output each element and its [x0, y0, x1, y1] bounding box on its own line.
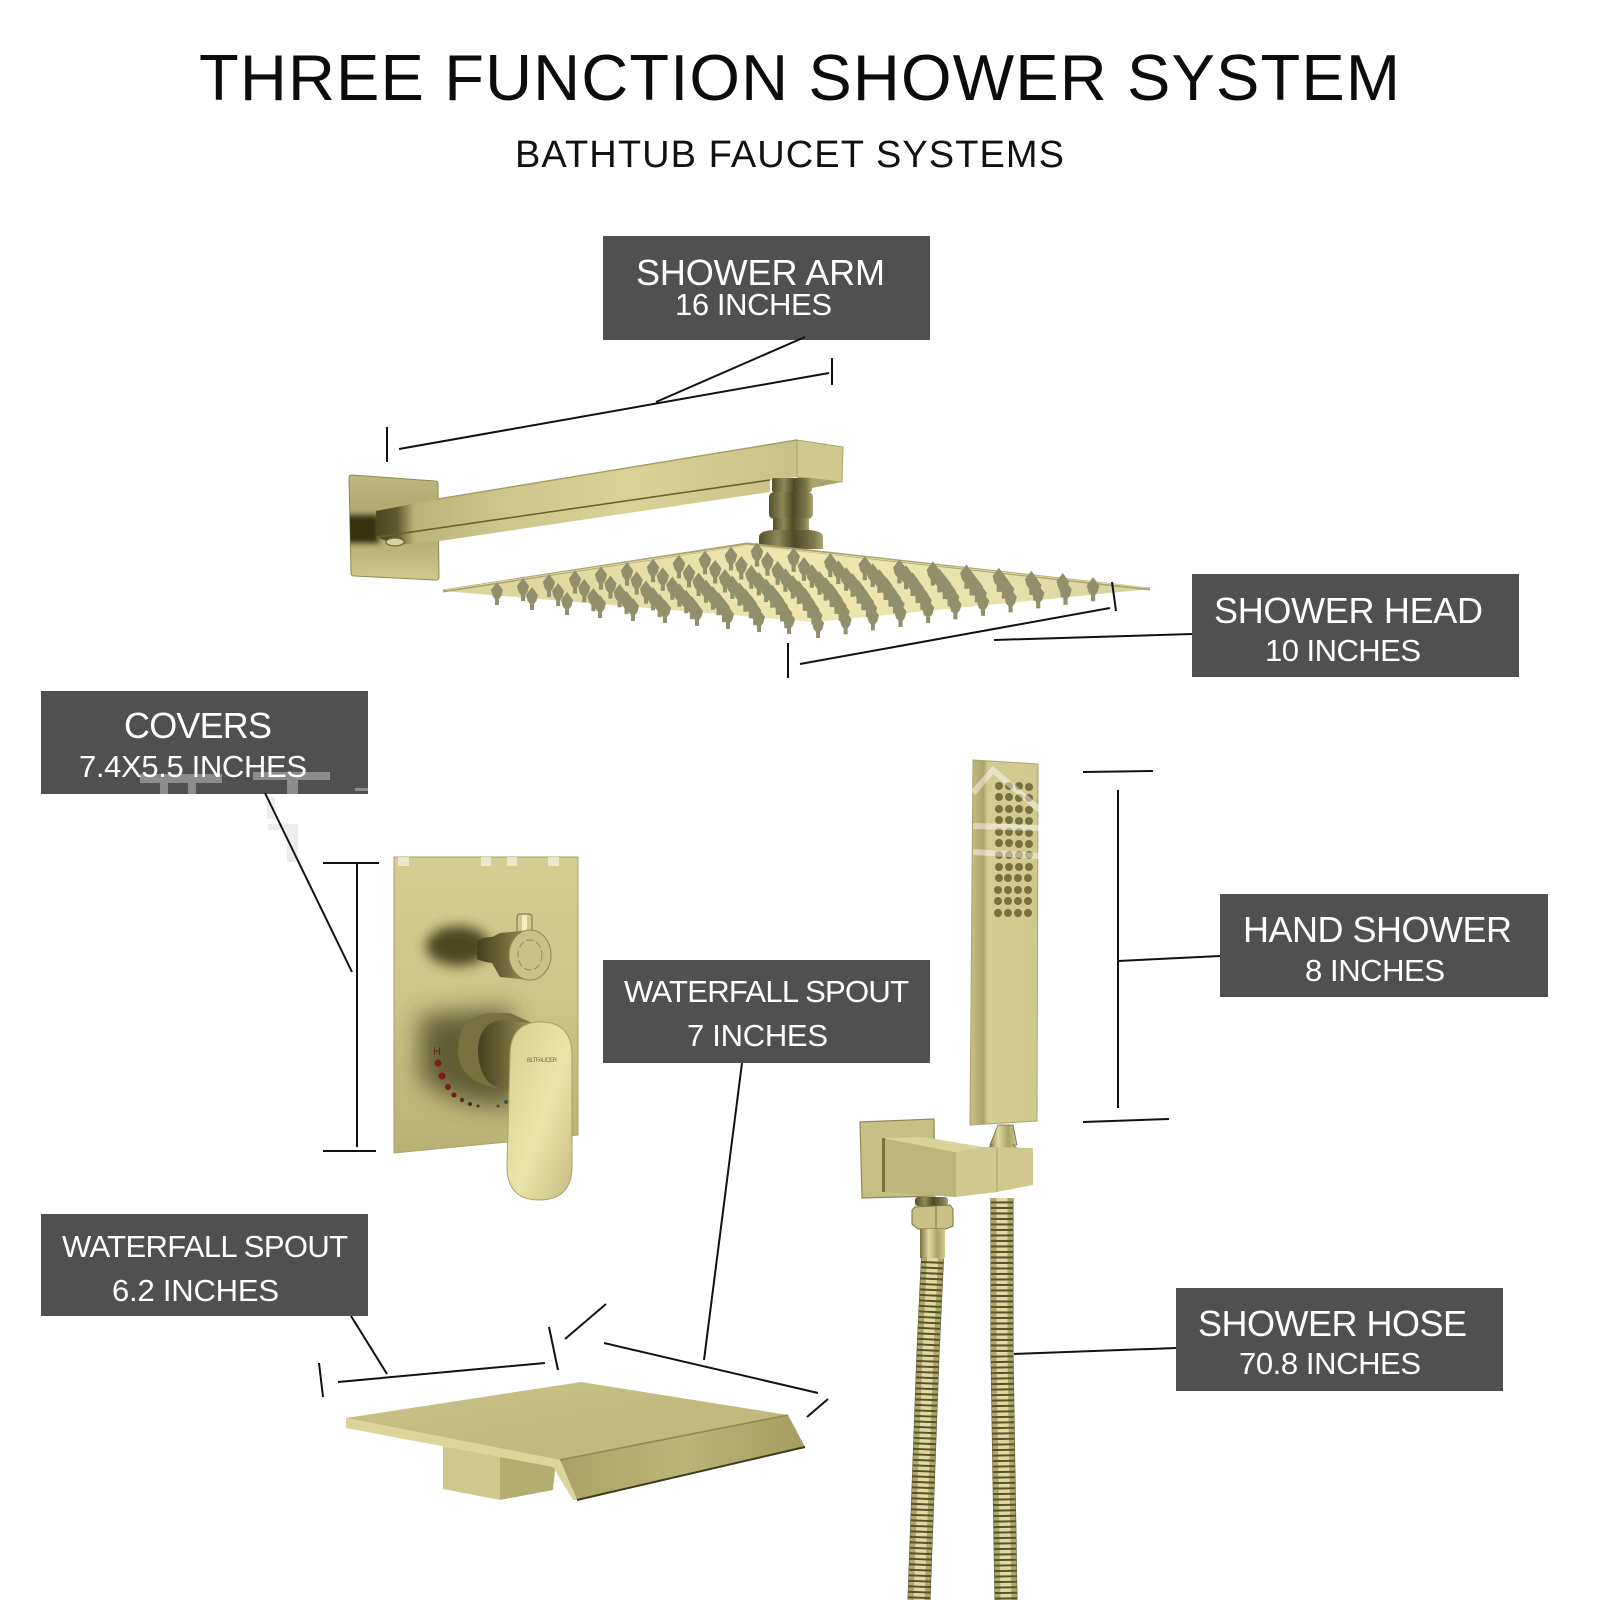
diverter knob: [477, 914, 551, 980]
dimension: covers: [265, 793, 379, 1151]
wall plate: [345, 475, 439, 580]
label: shower arm: [603, 236, 930, 340]
right hose: [1002, 1198, 1006, 1600]
label: covers: 7.4X5.5 INCHES: [79, 749, 307, 784]
arm: [376, 440, 843, 546]
subtitle: BATHTUB FAUCET SYSTEMS: [515, 134, 1064, 176]
label: hand shower: HAND SHOWER: [1243, 909, 1512, 950]
product: hand shower: [860, 760, 1040, 1198]
label: shower arm: SHOWER ARM: [636, 252, 885, 293]
dimension: shower arm: [387, 337, 832, 462]
label: covers: COVERS: [124, 705, 272, 746]
label: shower hose: 70.8 INCHES: [1239, 1346, 1421, 1381]
dimension: hand shower: [1083, 771, 1220, 1122]
label: hand shower: 8 INCHES: [1305, 953, 1445, 988]
product: waterfall spout: [346, 1382, 805, 1500]
watermark notches: [398, 857, 559, 866]
product: hoses: [912, 1197, 1006, 1600]
spray nozzles: [994, 782, 1033, 917]
label: waterfall spout 6.2 inches: 6.2 INCHES: [112, 1273, 279, 1308]
label: waterfall spout 7 inches: 7 INCHES: [687, 1018, 828, 1053]
nozzles: [491, 542, 1099, 638]
top face: [346, 1382, 788, 1460]
holder block: [882, 1137, 1033, 1197]
stem: [443, 1440, 500, 1500]
label: waterfall spout 6.2 inches: [41, 1214, 368, 1316]
label: shower head: 10 INCHES: [1265, 633, 1421, 668]
label: shower hose: SHOWER HOSE: [1198, 1303, 1467, 1344]
lever handle: [507, 1022, 572, 1200]
leader: shower hose: [1014, 1348, 1176, 1354]
label: waterfall spout 7 inches: WATERFALL SPOUT: [624, 974, 909, 1009]
watermark traces near covers: [267, 797, 298, 862]
temperature marks: [433, 1046, 508, 1108]
holder cone: [988, 1125, 1017, 1153]
neck: [759, 478, 823, 549]
left hose: [919, 1258, 932, 1600]
head plate: [443, 544, 1150, 622]
label: waterfall spout 6.2 inches: WATERFALL SPOUT: [62, 1229, 348, 1264]
lever cylinder: [458, 1013, 532, 1093]
label: shower hose: [1176, 1288, 1503, 1391]
label: waterfall spout 7 inches: [603, 960, 930, 1063]
front panel: [560, 1415, 805, 1500]
label: covers: [41, 691, 368, 794]
label: shower head: SHOWER HEAD: [1214, 590, 1483, 631]
watermark over handle: [973, 770, 1040, 856]
left lip: [346, 1418, 577, 1500]
temperature marks: H: [433, 1046, 441, 1058]
wall bracket plate: [860, 1119, 935, 1198]
handle body: [970, 760, 1038, 1125]
brand text: BLTFAUCER: [527, 1058, 558, 1064]
title: THREE FUNCTION SHOWER SYSTEM: [199, 41, 1400, 114]
plate shadows: [420, 926, 520, 1105]
label: shower arm: 16 INCHES: [675, 287, 832, 322]
product: valve trim plate: [394, 857, 578, 1200]
dimension: shower head: [788, 582, 1192, 678]
plate: [394, 857, 578, 1153]
dimension: waterfall spout 6.2 inches: [319, 1316, 558, 1397]
product: shower arm and head: [345, 440, 1150, 638]
label: hand shower: [1220, 894, 1548, 997]
dimension: waterfall spout 7 inches: [565, 1063, 828, 1417]
label: shower head: [1192, 574, 1519, 677]
inlet connector: [912, 1197, 953, 1258]
